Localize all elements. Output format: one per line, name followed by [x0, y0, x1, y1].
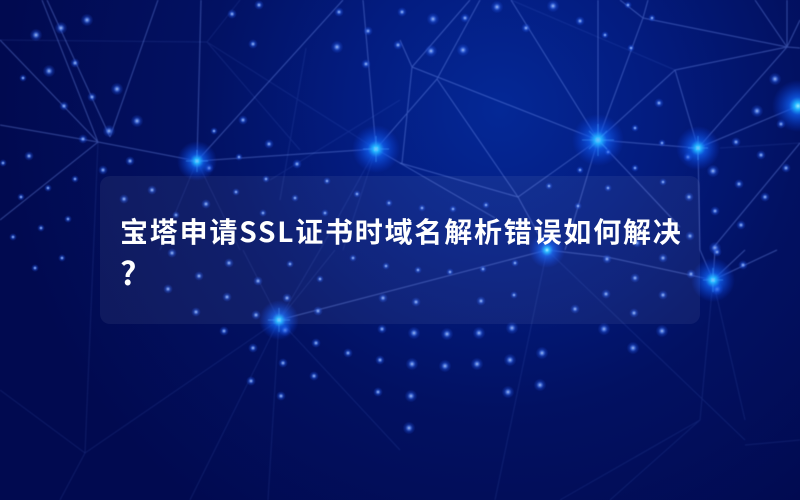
glowing network nodes	[177, 80, 800, 340]
network lines	[0, 0, 800, 320]
title	[120, 211, 683, 295]
node flares	[186, 124, 723, 332]
title: 宝塔申请SSL证书时域名解析错误如何解决	[120, 211, 683, 251]
title: ?	[120, 249, 138, 295]
panel: title card	[100, 176, 700, 324]
